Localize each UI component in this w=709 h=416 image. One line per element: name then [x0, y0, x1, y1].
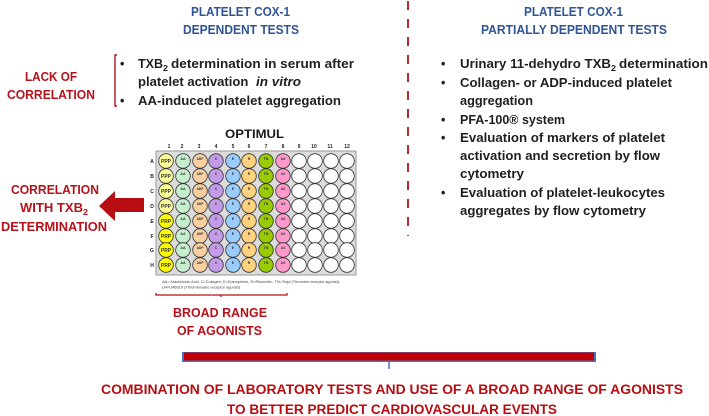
plate legend: U4=U46619 (Thromboxane receptor agonist): [162, 286, 240, 290]
arrow: towards correlation label: [99, 191, 144, 221]
partially dependent tests list: Evaluation of markers of platelet: [460, 131, 666, 145]
dependent tests list: determination in serum after: [171, 57, 354, 71]
wells: column 8 U46619: U4: [281, 172, 285, 176]
wells: column 8 U46619: U4: [281, 217, 285, 221]
wells: column 3 ADP: ADP: [197, 202, 204, 206]
wells: column 3 ADP: ADP: [197, 232, 204, 236]
wells: column 2 AA: AA: [180, 246, 186, 250]
wells: column 7 TRAP: TN: [264, 217, 269, 221]
wells: column 5 epinephrine: E: [232, 172, 235, 176]
plate: 96-well OPTIMUL: 4: [215, 144, 218, 150]
partially dependent tests list: Evaluation of platelet-leukocytes: [460, 186, 665, 200]
plate: 96-well OPTIMUL: G: [150, 248, 154, 254]
wells: column 5 epinephrine: [226, 154, 240, 272]
wells: column 4 collagen: C: [215, 246, 218, 250]
dependent tests list: •: [120, 94, 124, 108]
wells: column 2 AA: AA: [180, 217, 186, 221]
dependent tests list: [120, 57, 354, 108]
correlation label: CORRELATION: [11, 183, 99, 197]
partially dependent tests list: •: [441, 131, 445, 145]
partially dependent tests list: Collagen- or ADP-induced platelet: [460, 76, 673, 90]
wells: column 8 U46619: U4: [281, 202, 285, 206]
wells: column 4 collagen: [209, 154, 223, 272]
wells: column 6 ristocetin: R: [248, 187, 251, 191]
wells: column 8 U46619: U4: [281, 157, 285, 161]
wells: column 1 platelet samples: PPP: [161, 159, 172, 165]
wells: column 2 AA: AA: [180, 202, 186, 206]
wells: column 7 TRAP: TN: [264, 261, 269, 265]
partially dependent tests list: PFA-100® system: [460, 113, 565, 127]
dependent tests list: TXB: [138, 57, 163, 71]
wells: column 7 TRAP: TN: [264, 157, 269, 161]
dependent tests list: 2: [163, 64, 169, 73]
plate legend: [162, 280, 340, 290]
partially dependent tests list: [441, 57, 708, 218]
plate: 96-well OPTIMUL: 11: [327, 144, 333, 150]
wells: empty columns 9 to 12: [292, 154, 354, 272]
plate: 96-well OPTIMUL: 9: [298, 144, 301, 150]
wells: column 5 epinephrine: E: [232, 246, 235, 250]
lack of correlation label: LACK OF: [25, 70, 77, 84]
correlation label: [1, 183, 107, 234]
plate: 96-well OPTIMUL: A: [150, 159, 154, 165]
correlation label: WITH TXB: [20, 201, 83, 215]
plate: 96-well OPTIMUL: E: [150, 219, 154, 225]
chart title: OPTIMUL: OPTIMUL: [225, 129, 284, 141]
plate legend: AA= Arachidonic Acid, C=Collagen, E=Epinephrine, R=Ristocetin, TN=Trapl (Thrombin receptor agonist),: [162, 280, 340, 284]
partially dependent tests list: aggregation: [460, 94, 533, 108]
correlation label: 2: [83, 208, 89, 217]
wells: column 6 ristocetin: R: [248, 157, 251, 161]
wells: column 7 TRAP: [259, 154, 273, 272]
wells: column 3 ADP: ADP: [197, 261, 204, 265]
wells: column 4 collagen: C: [215, 202, 218, 206]
plate: 96-well OPTIMUL: 8: [282, 144, 285, 150]
dependent tests list: •: [120, 57, 124, 71]
wells: column 7 TRAP: TN: [264, 202, 269, 206]
heading: dependent tests: PLATELET COX-1: [191, 5, 290, 19]
wells: column 3 ADP: ADP: [197, 217, 204, 221]
plate: 96-well OPTIMUL: [150, 144, 356, 275]
plate: 96-well OPTIMUL: D: [150, 204, 154, 210]
wells: column 6 ristocetin: R: [248, 232, 251, 236]
wells: column 5 epinephrine: E: [232, 202, 235, 206]
wells: column 8 U46619: U4: [281, 261, 285, 265]
wells: column 2 AA: AA: [180, 187, 186, 191]
plate: 96-well OPTIMUL: H: [150, 263, 154, 269]
heading: partially dependent tests: PARTIALLY DEPENDENT TESTS: [481, 23, 667, 37]
wells: column 4 collagen: C: [215, 157, 218, 161]
wells: column 4 collagen: C: [215, 187, 218, 191]
wells: column 7 TRAP: TN: [264, 246, 269, 250]
wells: column 5 epinephrine: E: [232, 261, 235, 265]
broad range label: BROAD RANGE: [173, 306, 267, 320]
dependent tests list: platelet activation: [138, 75, 252, 89]
wells: column 2 AA: [176, 154, 190, 272]
wells: column 5 epinephrine: E: [232, 187, 235, 191]
partially dependent tests list: Urinary 11-dehydro TXB: [460, 57, 611, 71]
heading: partially dependent tests: [481, 5, 667, 37]
wells: column 8 U46619: U4: [281, 246, 285, 250]
partially dependent tests list: •: [441, 186, 445, 200]
partially dependent tests list: •: [441, 76, 445, 90]
bracket: [115, 55, 117, 106]
wells: column 3 ADP: ADP: [197, 157, 204, 161]
plate: 96-well OPTIMUL: F: [150, 234, 154, 240]
heading: dependent tests: [183, 5, 299, 37]
wells: column 1 platelet samples: PPP: [161, 189, 172, 195]
heading: partially dependent tests: PLATELET COX-1: [524, 5, 623, 19]
wells: column 4 collagen: C: [215, 217, 218, 221]
partially dependent tests list: activation and secretion by flow: [460, 149, 660, 163]
heading: dependent tests: DEPENDENT TESTS: [183, 23, 299, 37]
divider: dashed line: [407, 1, 409, 236]
wells: column 8 U46619: [276, 154, 290, 272]
wells: column 6 ristocetin: R: [248, 172, 251, 176]
wells: column 1 platelet samples: PRP: [161, 219, 172, 225]
partially dependent tests list: aggregates by flow cytometry: [460, 204, 646, 218]
plate: 96-well OPTIMUL: 1: [168, 144, 171, 150]
combining bar: [182, 352, 596, 369]
partially dependent tests list: determination: [619, 57, 708, 71]
plate: 96-well OPTIMUL: 7: [265, 144, 268, 150]
broad range label: [173, 306, 267, 338]
wells: column 8 U46619: U4: [281, 232, 285, 236]
dependent tests list: AA-induced platelet aggregation: [138, 94, 341, 108]
wells: column 5 epinephrine: E: [232, 157, 235, 161]
plate: 96-well OPTIMUL: 2: [181, 144, 184, 150]
wells: column 8 U46619: U4: [281, 187, 285, 191]
plate: 96-well OPTIMUL: C: [150, 189, 154, 195]
wells: column 1 platelet samples: PPP: [161, 174, 172, 180]
conclusion: COMBINATION OF LABORATORY TESTS AND USE OF A BROAD RANGE OF AGONISTS: [101, 382, 683, 397]
wells: column 1 platelet samples: PRP: [161, 234, 172, 240]
wells: column 3 ADP: ADP: [197, 187, 204, 191]
partially dependent tests list: •: [441, 57, 445, 71]
wells: column 2 AA: AA: [180, 232, 186, 236]
plate: 96-well OPTIMUL: 10: [311, 144, 317, 150]
panel: COX-1 dependent tests: [7, 5, 354, 108]
bracket: broad range of agonists: [156, 293, 287, 297]
wells: column 6 ristocetin: R: [248, 261, 251, 265]
conclusion: [101, 382, 683, 416]
wells: column 6 ristocetin: R: [248, 217, 251, 221]
wells: column 1 platelet samples: PRP: [161, 263, 172, 269]
wells: column 1 platelet samples: PRP: [161, 248, 172, 254]
lack of correlation label: [7, 70, 95, 102]
wells: column 2 AA: AA: [180, 157, 186, 161]
plate: 96-well OPTIMUL: 3: [198, 144, 201, 150]
correlation label: DETERMINATION: [1, 220, 107, 234]
wells: column 4 collagen: C: [215, 172, 218, 176]
plate: 96-well OPTIMUL: 6: [248, 144, 251, 150]
wells: column 7 TRAP: TN: [264, 232, 269, 236]
wells: column 1 platelet samples: [159, 154, 173, 272]
wells: column 6 ristocetin: R: [248, 202, 251, 206]
broad range label: OF AGONISTS: [177, 324, 262, 338]
wells: column 3 ADP: ADP: [197, 246, 204, 250]
wells: column 7 TRAP: TN: [264, 172, 269, 176]
wells: column 7 TRAP: TN: [264, 187, 269, 191]
wells: column 1 platelet samples: PPP: [161, 204, 172, 210]
wells: column 5 epinephrine: E: [232, 232, 235, 236]
wells: column 4 collagen: C: [215, 232, 218, 236]
wells: column 3 ADP: [193, 154, 207, 272]
lack of correlation label: CORRELATION: [7, 88, 95, 102]
wells: column 6 ristocetin: [242, 154, 256, 272]
plate: 96-well OPTIMUL: 5: [232, 144, 235, 150]
panel: COX-1 partially dependent tests: [441, 5, 708, 218]
partially dependent tests list: •: [441, 113, 445, 127]
plate: 96-well OPTIMUL: B: [150, 174, 154, 180]
wells: column 2 AA: AA: [180, 172, 186, 176]
partially dependent tests list: cytometry: [460, 167, 524, 181]
dependent tests list: in vitro: [256, 75, 301, 89]
partially dependent tests list: 2: [611, 64, 617, 73]
wells: column 3 ADP: ADP: [197, 172, 204, 176]
wells: column 2 AA: AA: [180, 261, 186, 265]
wells: column 5 epinephrine: E: [232, 217, 235, 221]
wells: column 4 collagen: C: [215, 261, 218, 265]
wells: column 6 ristocetin: R: [248, 246, 251, 250]
plate: 96-well OPTIMUL: 12: [344, 144, 350, 150]
